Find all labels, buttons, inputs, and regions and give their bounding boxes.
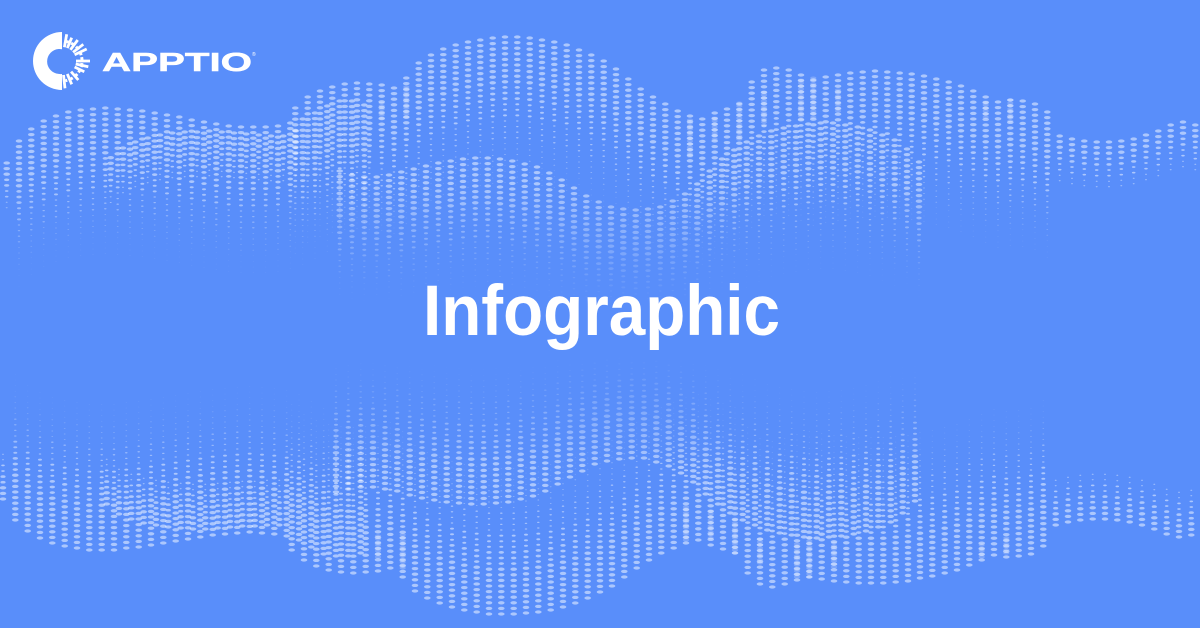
logo wordmark: APPTIO	[102, 47, 252, 77]
title: Infographic	[423, 272, 780, 351]
icon: logo ring	[33, 32, 90, 90]
top dotted wave	[3, 35, 1198, 292]
registered mark: ®	[252, 51, 256, 58]
bottom dotted wave	[0, 368, 1194, 616]
logo	[33, 32, 256, 90]
